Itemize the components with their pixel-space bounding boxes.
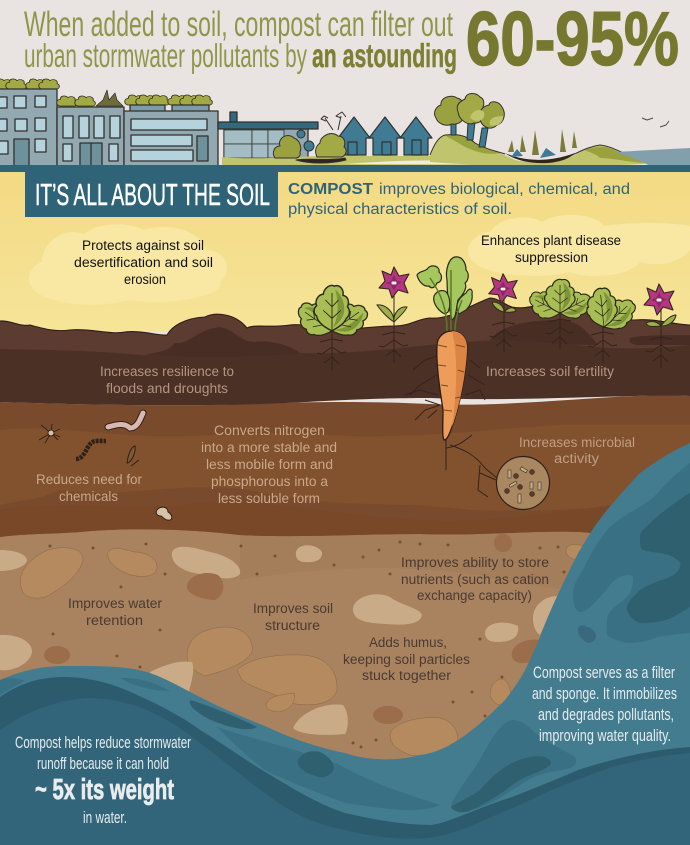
text: protects against erosion bbox=[74, 238, 213, 287]
text: soil fertility: Increases soil fertility bbox=[486, 364, 614, 379]
carrot roots bbox=[405, 355, 497, 497]
water bbox=[0, 443, 690, 845]
flower 1 bbox=[377, 267, 409, 363]
upper-right dark current bbox=[627, 493, 690, 623]
rocks bbox=[0, 534, 590, 756]
heading box bbox=[25, 172, 278, 217]
text: microbial activity bbox=[519, 435, 635, 466]
callout: left water text: in water. bbox=[83, 808, 127, 827]
text: protects against erosion: erosion bbox=[124, 272, 166, 287]
text: water retention: retention bbox=[86, 613, 143, 628]
heading box: IT’S ALL ABOUT THE SOIL bbox=[35, 177, 270, 212]
soil specks bbox=[48, 540, 566, 748]
soil layers bbox=[0, 298, 690, 845]
dark stripe bbox=[0, 677, 690, 845]
skyline bbox=[0, 79, 690, 166]
carrot leaves bbox=[417, 257, 472, 331]
small blob bbox=[578, 625, 596, 643]
sky panel bbox=[0, 172, 690, 332]
text: nitrogen: into a more stable and bbox=[201, 440, 337, 455]
text: microbial activity: Increases microbial bbox=[519, 435, 635, 450]
middle brown soil bbox=[0, 395, 690, 537]
upper-right mid current bbox=[573, 463, 690, 643]
text: disease suppression bbox=[481, 233, 621, 265]
text: resilience: floods and droughts bbox=[106, 381, 228, 396]
text: humus bbox=[343, 635, 470, 683]
building 2 bbox=[57, 96, 77, 106]
icon: grub bbox=[156, 507, 172, 520]
callout: left water text: ~ 5x its weight bbox=[35, 774, 174, 806]
intro text: improves biological, chemical, and bbox=[379, 181, 630, 198]
text: resilience: Increases resilience to bbox=[100, 364, 234, 379]
icon: spider bbox=[39, 424, 60, 443]
intro text: physical characteristics of soil. bbox=[288, 201, 512, 218]
leafy plant 3 bbox=[585, 287, 641, 363]
text: nitrogen: less mobile form and bbox=[206, 457, 333, 472]
text: store nutrients: nutrients (such as cation bbox=[401, 572, 549, 587]
text: reduces chemicals bbox=[36, 472, 142, 504]
text: nitrogen: Converts nitrogen bbox=[214, 423, 325, 438]
text: disease suppression: suppression bbox=[515, 250, 588, 265]
text: protects against erosion: desertification and soil bbox=[74, 255, 213, 270]
text: nitrogen: phosphorous into a bbox=[211, 474, 328, 489]
icon: seed bbox=[127, 446, 139, 466]
flower 2 bbox=[489, 274, 518, 353]
title: urban stormwater pollutants by bbox=[24, 37, 307, 74]
critters bbox=[39, 413, 172, 520]
main deep water bbox=[0, 698, 690, 845]
icon: pale worm bbox=[108, 413, 143, 428]
text: store nutrients: exchange capacity) bbox=[417, 588, 532, 603]
soil mounds bbox=[145, 320, 690, 357]
text: humus: keeping soil particles bbox=[343, 652, 470, 667]
intro text bbox=[288, 181, 630, 218]
text: nitrogen bbox=[201, 423, 337, 506]
left currents bbox=[0, 678, 170, 695]
building 4 bbox=[224, 129, 308, 163]
text: humus: Adds humus, bbox=[369, 635, 447, 650]
sea bbox=[615, 148, 690, 166]
text: reduces chemicals: Reduces need for bbox=[36, 472, 142, 487]
houses bbox=[338, 117, 432, 155]
text: humus: stuck together bbox=[362, 668, 452, 683]
title: an astounding bbox=[312, 37, 457, 74]
title bbox=[24, 5, 457, 74]
water light body bbox=[0, 443, 690, 845]
text: store nutrients: Improves ability to store bbox=[401, 555, 549, 570]
text: soil structure: Improves soil bbox=[253, 601, 333, 616]
callout: left water text: runoff because it can hold bbox=[37, 754, 169, 773]
shrubs bbox=[273, 112, 346, 163]
plants bbox=[291, 267, 676, 370]
text: microbial activity: activity bbox=[554, 451, 599, 466]
text: water retention: Improves water bbox=[68, 596, 163, 611]
icon: microbe circle bbox=[480, 456, 550, 510]
text: protects against erosion: Protects against soil bbox=[82, 238, 204, 253]
title: When added to soil, compost can filter out bbox=[24, 5, 453, 44]
lower tan soil bbox=[0, 520, 690, 845]
callout: left water text bbox=[15, 733, 191, 827]
icon: millipede bbox=[76, 441, 106, 459]
text: disease suppression: Enhances plant disease bbox=[481, 233, 621, 248]
text: water retention bbox=[68, 596, 163, 628]
text: resilience bbox=[100, 364, 234, 396]
text: store nutrients bbox=[401, 555, 549, 603]
text: nitrogen: less soluble form bbox=[218, 491, 320, 506]
trees bbox=[435, 93, 504, 147]
intro text: COMPOST bbox=[288, 181, 374, 198]
carrot root body bbox=[437, 331, 467, 440]
text: soil structure: structure bbox=[265, 618, 320, 633]
ground bbox=[222, 156, 690, 166]
birds bbox=[642, 118, 669, 127]
building 1 bbox=[0, 79, 318, 166]
teal band bbox=[0, 165, 690, 172]
middle current bbox=[217, 727, 440, 810]
text: soil structure bbox=[253, 601, 333, 633]
leafy plant 1 bbox=[291, 285, 373, 370]
dark upper soil bbox=[0, 298, 690, 405]
carrot bbox=[405, 257, 497, 497]
flower 3 bbox=[644, 284, 676, 368]
leafy plant 2 bbox=[524, 279, 596, 350]
callout: left water text: Compost helps reduce stormwater bbox=[15, 733, 191, 752]
text: reduces chemicals: chemicals bbox=[59, 489, 118, 504]
hill bbox=[430, 135, 650, 166]
building 3 bbox=[125, 95, 145, 105]
clouds bbox=[29, 215, 690, 305]
callout: right water text bbox=[532, 663, 677, 745]
bottom-right mid current bbox=[451, 720, 576, 811]
